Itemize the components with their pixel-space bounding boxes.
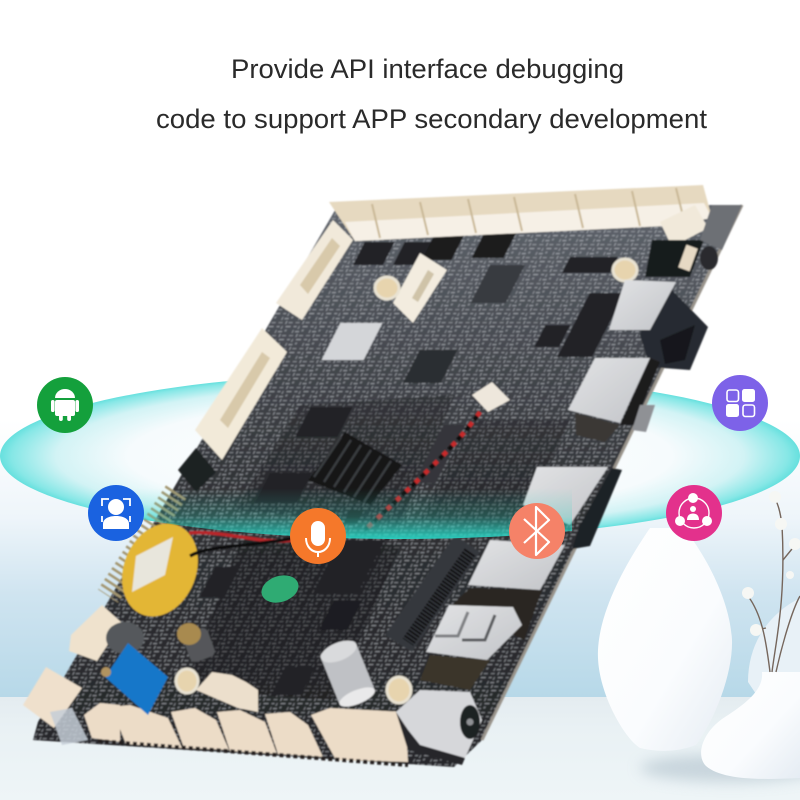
icon: apps grid bbox=[712, 375, 768, 431]
bottom connector row bbox=[84, 703, 408, 762]
far left connector bbox=[23, 667, 82, 728]
halo ellipse bbox=[0, 373, 800, 539]
table shadow bbox=[640, 754, 800, 782]
bronze cylinder bbox=[177, 623, 216, 664]
DC power jack bbox=[396, 690, 482, 765]
left connector bbox=[195, 328, 287, 460]
SD card slot bbox=[572, 468, 622, 549]
mini PCIe slot bbox=[385, 535, 480, 652]
back vase bbox=[748, 598, 800, 700]
dark capacitor bbox=[106, 622, 144, 654]
silver electrolytic capacitor bbox=[318, 636, 377, 711]
top connector row bbox=[329, 185, 712, 241]
chips bbox=[134, 222, 661, 695]
vases and branches bbox=[598, 491, 800, 782]
display port bbox=[523, 467, 608, 525]
brass mounting holes bbox=[176, 259, 637, 703]
centre connector bbox=[393, 253, 447, 323]
silkscreen bbox=[33, 205, 742, 767]
dark copper areas bbox=[185, 395, 570, 700]
green dot bbox=[258, 571, 302, 607]
branches bbox=[748, 498, 800, 672]
audio jack bbox=[645, 240, 718, 277]
halo band over board bbox=[136, 492, 572, 539]
lower left connector bbox=[69, 605, 122, 661]
front vase bbox=[701, 672, 800, 779]
title line 2: code to support APP secondary development bbox=[156, 104, 708, 134]
right small connector bbox=[660, 205, 708, 247]
connector teeth bbox=[98, 741, 408, 765]
icon: face recognition bbox=[88, 485, 144, 541]
icon: microphone bbox=[290, 508, 346, 564]
icon: bluetooth bbox=[509, 503, 565, 559]
blue potentiometer bbox=[101, 643, 168, 715]
twisted wire pair bbox=[365, 412, 480, 530]
side switch bbox=[700, 205, 742, 250]
mid bottom connector bbox=[196, 672, 258, 712]
title line 1: Provide API interface debugging bbox=[231, 54, 624, 84]
right board edge bbox=[482, 205, 742, 740]
pin comb left edge bbox=[108, 492, 176, 596]
icon: android bbox=[37, 377, 93, 433]
heatsink bbox=[308, 432, 402, 505]
board base bbox=[33, 205, 742, 767]
circuit board bbox=[23, 185, 742, 767]
lower USB port bbox=[420, 605, 522, 690]
pin header upper bbox=[178, 448, 216, 492]
icon: shared network bbox=[666, 485, 722, 541]
clear LED bbox=[50, 708, 88, 745]
small white plug bbox=[472, 382, 510, 412]
Ethernet socket bbox=[609, 280, 708, 370]
yellow coin battery bbox=[109, 512, 211, 628]
blossoms bbox=[742, 491, 800, 636]
title bbox=[156, 54, 708, 134]
table surface bbox=[0, 697, 800, 800]
upper USB port bbox=[452, 540, 565, 640]
HDMI port bbox=[568, 358, 660, 442]
battery wires bbox=[189, 533, 295, 556]
large vase bbox=[598, 528, 732, 751]
upper left connector bbox=[276, 220, 353, 320]
